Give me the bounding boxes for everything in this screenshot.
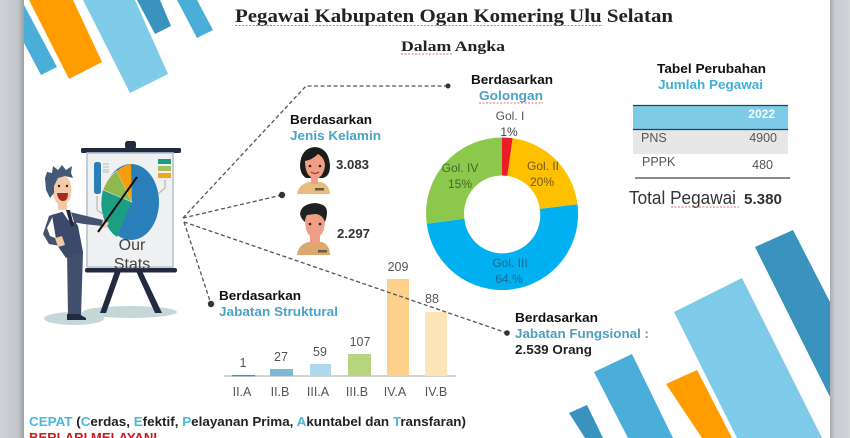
bar chart: II.B — [271, 385, 289, 399]
bar chart: 88 — [425, 292, 439, 306]
bar chart: II.A — [233, 385, 252, 399]
table: PNS — [641, 131, 667, 145]
title: Pegawai Kabupaten Ogan Komering Ulu Selatan — [235, 7, 674, 27]
bar chart: 59 — [313, 345, 327, 359]
icon: female employee — [297, 147, 330, 194]
pie on board — [101, 164, 159, 240]
segment: Gol. III — [427, 204, 578, 290]
presenter illustration — [43, 141, 181, 325]
segment: Gol. I — [502, 137, 513, 176]
heading: jabatan fungsional: Berdasarkan — [515, 311, 598, 325]
bar chart: 209 — [388, 260, 408, 274]
motto line: CEPAT (Cerdas, Efektif, Pelayanan Prima, Akuntabel dan Transfaran) — [29, 415, 466, 429]
pointer stick — [98, 177, 137, 232]
bottom-right decorative bars — [569, 230, 830, 438]
bar chart: III.B — [346, 385, 368, 399]
board legends — [94, 159, 171, 215]
value: male: 2.297 — [337, 227, 370, 241]
bar chart: III.A — [307, 385, 330, 399]
donut labels: Gol. III — [492, 256, 528, 270]
board — [87, 153, 173, 267]
heading: jabatan struktural: Jabatan Struktural — [219, 305, 338, 319]
donut chart — [426, 137, 578, 290]
heading: golongan: Berdasarkan — [471, 73, 553, 87]
icon: male employee — [297, 203, 330, 255]
board caption: Stats — [114, 256, 150, 273]
heading: jenis kelamin: Jenis Kelamin — [290, 129, 381, 143]
donut labels: Gol. II — [527, 159, 559, 173]
value: female: 3.083 — [336, 158, 369, 172]
bar chart: 1 — [240, 356, 247, 370]
heading: jabatan fungsional — [515, 311, 649, 357]
table: 4900 — [749, 131, 777, 145]
bar chart: IV.B — [425, 385, 447, 399]
board caption — [114, 237, 150, 273]
table: 480 — [752, 158, 773, 172]
floor shadows — [44, 306, 177, 325]
donut labels: 64.% — [495, 272, 523, 286]
heading: jabatan fungsional: Jabatan Fungsional : — [515, 327, 649, 341]
total pegawai: 5.380 — [744, 191, 782, 208]
dashed connector to Golongan — [183, 84, 450, 218]
table: 2022 — [748, 107, 775, 121]
donut labels: 1% — [500, 125, 518, 139]
heading: jenis kelamin: Berdasarkan — [290, 113, 372, 127]
total pegawai: Total Pegawai — [629, 187, 736, 208]
donut labels — [442, 109, 559, 286]
man — [43, 165, 109, 320]
donut labels: 20% — [530, 175, 554, 189]
top-left decorative bars — [24, 0, 213, 93]
heading: tabel perubahan: Tabel Perubahan — [657, 62, 766, 76]
table: PPPK — [642, 155, 676, 169]
dashed connector to Jenis Kelamin — [183, 192, 285, 218]
board caption: Our — [119, 237, 146, 254]
bar chart: IV.A — [384, 385, 407, 399]
subtitle: Dalam Angka — [401, 39, 506, 55]
heading: golongan: Golongan — [479, 89, 543, 103]
bar chart — [224, 260, 456, 399]
bar chart: 27 — [274, 350, 288, 364]
heading: jabatan struktural: Berdasarkan — [219, 289, 301, 303]
board stand — [81, 141, 181, 313]
donut labels: Gol. IV — [442, 161, 478, 175]
table — [633, 105, 790, 178]
dashed connector to Jabatan Struktural — [184, 222, 214, 307]
donut labels: Gol. I — [496, 109, 524, 123]
heading: jabatan fungsional: 2.539 Orang — [515, 343, 592, 357]
bar chart: 107 — [350, 335, 370, 349]
segment: Gol. II — [507, 138, 578, 209]
donut labels: 15% — [448, 177, 472, 191]
heading: jenis kelamin — [290, 113, 381, 143]
heading: jabatan struktural — [219, 289, 338, 319]
dashed connector to Jabatan Fungsional — [184, 222, 510, 336]
heading: tabel perubahan — [657, 62, 766, 92]
heading: tabel perubahan: Jumlah Pegawai — [658, 78, 763, 92]
heading: golongan — [471, 73, 553, 103]
segment: Gol. IV — [426, 138, 502, 224]
